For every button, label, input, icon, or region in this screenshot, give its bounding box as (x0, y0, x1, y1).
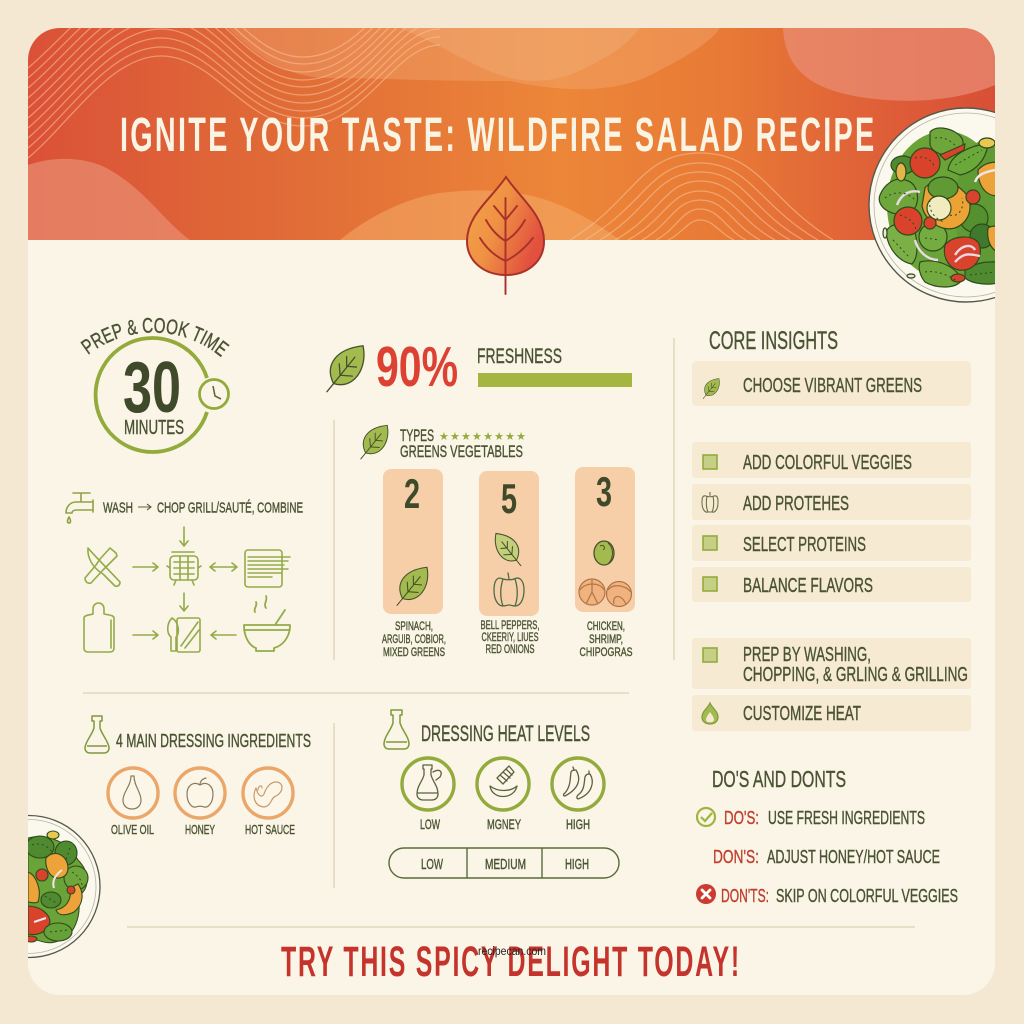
do row (724, 808, 925, 828)
icon: flame leaf (467, 177, 544, 294)
icon: bottle (85, 716, 109, 753)
freshness bar (478, 373, 632, 387)
card: greens (383, 469, 443, 614)
30 number: 30 (123, 348, 181, 428)
watermark: recipecan.com (478, 946, 546, 958)
panel: core insights (692, 327, 971, 731)
proteins caption: CHIPOGRAS (580, 645, 632, 659)
heat scale pill (389, 848, 619, 878)
header banner (28, 28, 995, 240)
heat labels (420, 816, 590, 832)
insight labels (743, 375, 968, 725)
insight labels: ADD PROTEHES (743, 493, 849, 515)
heat labels: HIGH (566, 816, 590, 832)
heat scale pill: HIGH (565, 856, 589, 873)
ingredient labels (111, 822, 295, 837)
90 percent: 90% (376, 335, 458, 399)
panel: prep and cook time (80, 318, 230, 454)
insight labels: ADD COLORFUL VEGGIES (743, 452, 912, 474)
dont row: DON'TS: (721, 886, 769, 906)
icon: check (697, 808, 715, 826)
timer ring (96, 338, 207, 452)
ingredient: honey (175, 768, 225, 818)
icon: recipe sheet (245, 550, 290, 587)
flow step: chop grill combine: CHOP GRILL/SAUTÉ, COMBINE (157, 500, 303, 516)
panel: types counts (361, 425, 635, 659)
freshness label: FRESHNESS (477, 345, 562, 368)
greens vegetables heading: GREENS VEGETABLES (400, 442, 523, 461)
proteins caption: SHRIMP, (589, 632, 623, 646)
card: vegetables (479, 471, 539, 616)
heading: DRESSING HEAT LEVELS (421, 721, 590, 746)
clock icon (200, 380, 228, 408)
heat: medium (477, 758, 529, 810)
flow step: wash: WASH (103, 500, 133, 516)
insight labels: PREP BY WASHING, (743, 644, 871, 666)
minutes label: MINUTES (124, 417, 184, 439)
ingredient labels: HOT SAUCE (245, 822, 295, 837)
heat scale pill: LOW (421, 856, 444, 873)
star row: ★★★★★★★★ (439, 430, 526, 443)
icon: small leaf (361, 425, 388, 459)
call to action: TRY THIS SPICY DELIGHT TODAY! (281, 938, 739, 986)
curved heading: PREP & COOK TIME (80, 318, 230, 358)
vegetables caption (480, 618, 540, 656)
ingredient: hot sauce (243, 768, 293, 818)
adjust row (713, 847, 940, 867)
insight labels: BALANCE FLAVORS (743, 575, 873, 597)
dont row (721, 886, 958, 906)
row icons (702, 378, 719, 724)
vegetables caption: RED ONIONS (486, 642, 534, 656)
card: proteins: 3 (596, 468, 612, 515)
illustration: salad plate bottom left (28, 814, 101, 958)
panel: freshness stat (327, 335, 632, 399)
greens caption: MIXED GREENS (383, 645, 445, 659)
insight rows (692, 361, 971, 731)
panel: preparation flow (66, 493, 303, 652)
core insights heading: CORE INSIGHTS (709, 327, 838, 355)
greens caption: SPINACH, (395, 619, 433, 633)
flow arrows (133, 527, 237, 639)
heat labels: LOW (420, 816, 440, 832)
types heading: TYPES (400, 426, 434, 445)
arrow: wash to chop (138, 504, 151, 510)
panel: heat levels (384, 710, 619, 878)
do row: DO'S: (724, 808, 759, 828)
vegetables caption: CKEERIY, LIUES (482, 630, 538, 644)
ingredient labels: HONEY (185, 822, 215, 837)
panel: dressing ingredients (85, 716, 311, 837)
dos heading: DO'S AND DONTS (712, 766, 846, 792)
card: proteins (575, 467, 635, 612)
insight labels: SELECT PROTEINS (743, 534, 866, 556)
icon: tap (66, 493, 93, 523)
icon: cutting board (84, 603, 114, 652)
ingredient labels: OLIVE OIL (111, 822, 154, 837)
greens caption (382, 619, 446, 659)
icon: steaming bowl (244, 596, 290, 651)
icon: cross (696, 884, 716, 904)
heat labels: MGNEY (487, 816, 521, 832)
icon: crossed knives (85, 548, 120, 586)
divider lines (83, 338, 915, 927)
icon: leaf (327, 346, 364, 392)
heading: 4 MAIN DRESSING INGREDIENTS (116, 731, 311, 751)
adjust row: ADJUST HONEY/HOT SAUCE (767, 847, 940, 867)
insight labels: CUSTOMIZE HEAT (743, 703, 861, 725)
card: vegetables: 5 (501, 475, 517, 522)
icon: bottle (384, 710, 409, 749)
icon: grill (167, 552, 201, 585)
insight labels: CHOOSE VIBRANT GREENS (743, 375, 922, 397)
heat: high (552, 758, 604, 810)
heat scale pill: MEDIUM (485, 856, 526, 873)
ingredient: olive oil (108, 768, 158, 818)
do row: USE FRESH INGREDIENTS (768, 808, 925, 828)
adjust row: DON'S: (713, 847, 759, 867)
panel: dos and donts (696, 766, 958, 906)
greens caption: ARGUIB, COBIOR, (382, 632, 446, 646)
proteins caption: CHICKEN, (587, 619, 625, 633)
illustration: salad plate top right (868, 107, 995, 303)
heat: low (402, 758, 454, 810)
vegetables caption: BELL PEPPERS, (480, 618, 540, 632)
proteins caption (580, 619, 632, 659)
icon: spoon and board (168, 618, 200, 652)
title: IGNITE YOUR TASTE: WILDFIRE SALAD RECIPE (120, 109, 874, 162)
card: greens: 2 (404, 470, 420, 517)
